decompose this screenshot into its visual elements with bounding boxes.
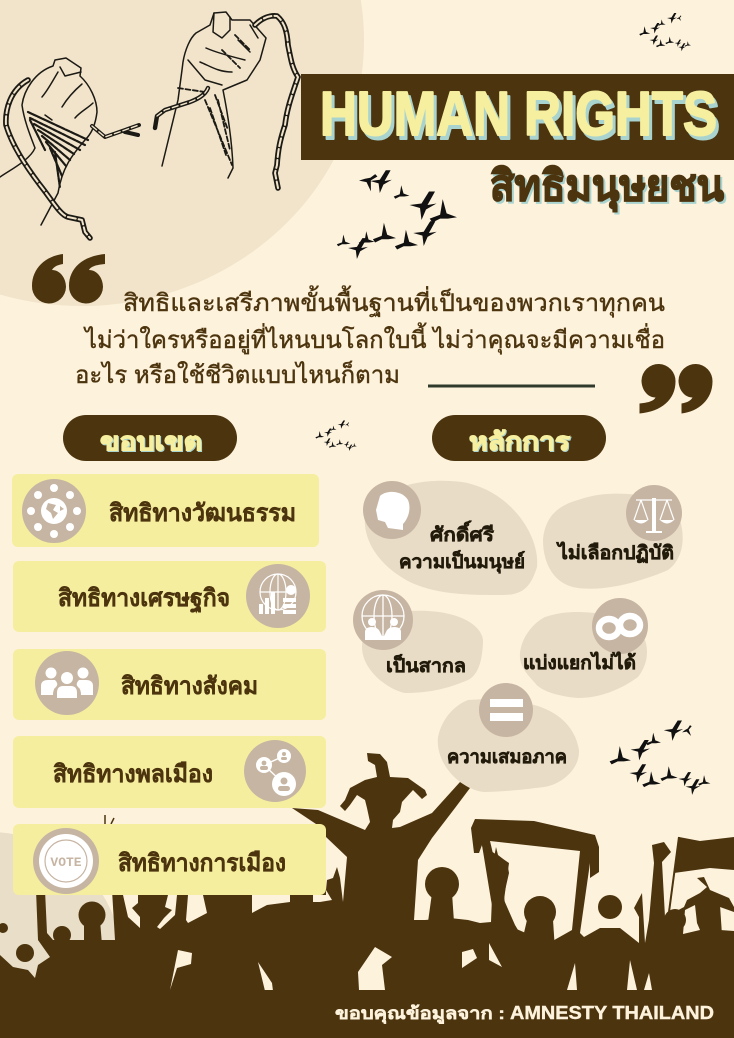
card: economic rights	[13, 561, 326, 632]
crowd: raised hand tip between cards	[105, 815, 114, 824]
flock of birds: lower right	[610, 720, 710, 795]
pill heading: scope	[63, 415, 237, 461]
subtitle: Thai: สิทธิมนุษยชน	[490, 162, 724, 212]
label: สิทธิทางสังคม	[121, 673, 258, 700]
principle: dignity: ความเป็นมนุษย์	[399, 549, 525, 574]
principle: dignity: ศักดิ์ศรี	[430, 520, 495, 546]
label: สิทธิทางวัฒนธรรม	[109, 500, 296, 527]
crowd: ground band	[0, 990, 734, 1038]
footer credit: AMNESTY THAILAND	[510, 1003, 714, 1023]
left chain	[6, 80, 139, 238]
card: political rights	[13, 824, 326, 895]
pill heading: principles: หลักการ	[470, 429, 572, 457]
label: สิทธิทางพลเมือง	[53, 761, 213, 788]
pill heading: scope: ขอบเขต	[101, 429, 203, 457]
flock of birds: centre top	[337, 170, 457, 259]
background circle: top left	[0, 0, 364, 306]
principle: universal	[353, 590, 483, 693]
icon: network of people	[244, 740, 306, 802]
right chain	[155, 16, 298, 188]
principle: indivisible	[520, 598, 648, 698]
footer credit: ขอบคุณข้อมูลจาก :	[335, 1004, 505, 1025]
label: สิทธิทางเศรษฐกิจ	[58, 585, 230, 614]
crowd: heads	[0, 845, 722, 962]
subtitle: Thai: สิทธิมนุษยชน	[492, 164, 726, 214]
illustration: broken chains on raised fists	[0, 12, 298, 238]
icon: globe with people	[22, 479, 86, 543]
principle: indivisible: แบ่งแยกไม่ได้	[523, 651, 636, 674]
flock of birds: centre small	[315, 420, 357, 451]
crowd silhouette	[0, 753, 734, 1038]
card: cultural rights	[12, 474, 319, 547]
card: civil rights	[13, 736, 326, 808]
right fist and arm	[162, 12, 266, 178]
pill heading: principles: หลักการ	[469, 428, 571, 456]
principle: equality: ความเสมอภาค	[447, 747, 567, 768]
principle: dignity	[363, 481, 537, 595]
closing quote mark	[640, 364, 713, 414]
pill heading: scope: ขอบเขต	[100, 428, 202, 456]
quote text	[75, 285, 665, 389]
crowd: cream gaps between figures	[123, 837, 734, 991]
title banner	[301, 74, 734, 160]
icon: vote badge	[33, 828, 99, 894]
principle: universal: เป็นสากล	[386, 653, 466, 677]
background circle: bottom left	[0, 832, 123, 1000]
quote text: ไม่ว่าใครหรืออยู่ที่ไหนบนโลกใบนี้ ไม่ว่าคุณจะมีความเชื่อ	[83, 322, 665, 355]
pill heading: principles	[432, 415, 606, 461]
icon: vote badge: VOTE	[50, 855, 82, 870]
footer credit	[335, 1003, 714, 1025]
scope list	[12, 474, 326, 895]
principle: equality	[438, 683, 579, 792]
crowd: flag and pole	[669, 837, 734, 912]
quote text: สิทธิและเสรีภาพขั้นพื้นฐานที่เป็นของพวกเราทุกคน	[123, 285, 665, 318]
card: social rights	[13, 649, 326, 720]
label: สิทธิทางการเมือง	[118, 850, 286, 877]
principle: non-discrimination: ไม่เลือกปฏิบัติ	[556, 541, 674, 564]
left fist	[0, 58, 97, 225]
icon: globe, bars and coins	[246, 564, 310, 628]
opening quote mark	[32, 254, 105, 304]
quote text: อะไร หรือใช้ชีวิตแบบไหนก็ตาม	[75, 360, 400, 389]
icon: three people	[35, 651, 99, 715]
flock of birds: top right	[639, 13, 691, 51]
principles diagram	[353, 481, 683, 792]
principle: non-discrimination	[543, 485, 683, 589]
